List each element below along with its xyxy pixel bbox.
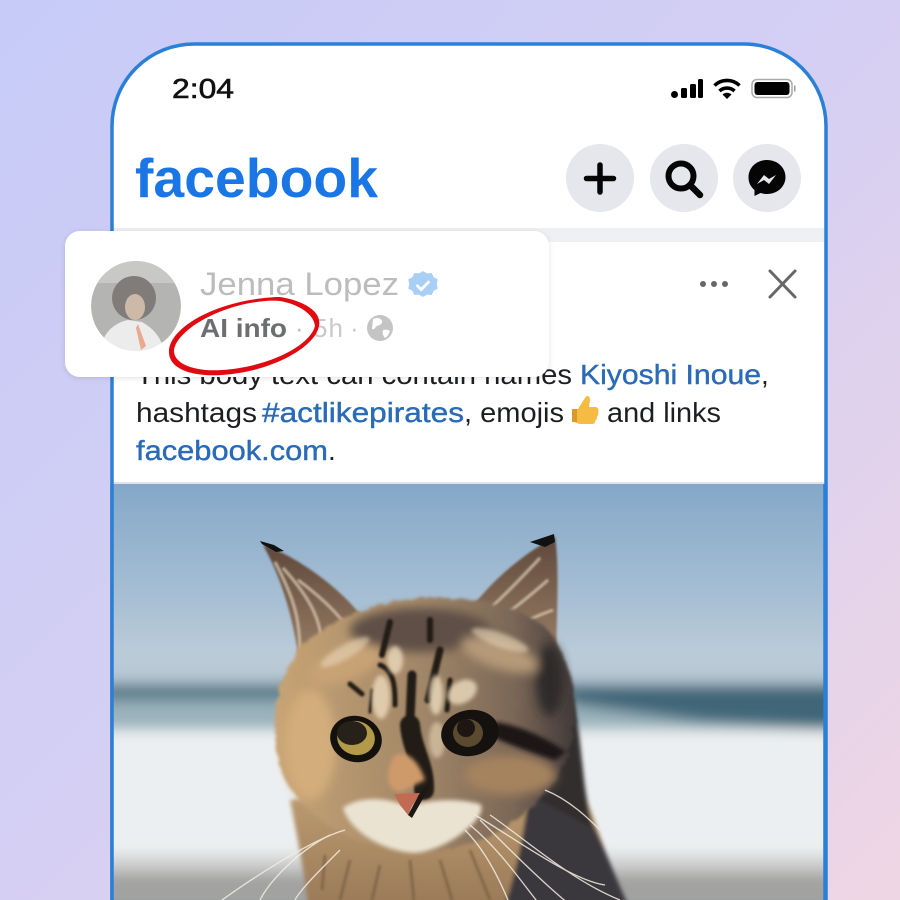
light forehead patches — [317, 623, 531, 758]
icon: battery — [752, 80, 796, 98]
icon: thumbs up emoji — [572, 396, 599, 424]
photo side borders — [112, 484, 825, 900]
icon: globe — [367, 315, 393, 341]
cat head — [275, 598, 575, 852]
button: messenger — [733, 144, 801, 212]
feed divider band — [114, 228, 824, 242]
button: search — [650, 144, 718, 212]
cat nose — [394, 793, 420, 815]
post body text: facebook.com — [136, 435, 328, 466]
post body text: , — [761, 359, 769, 390]
annotation: red hand-drawn ellipse — [169, 297, 319, 375]
post body text: #actlikepirates — [262, 397, 464, 428]
dark patch beside right eye — [495, 722, 566, 760]
post body text: . — [328, 435, 336, 466]
cat muzzle — [343, 754, 482, 853]
tan cheek and forehead tones — [284, 608, 564, 800]
whiskers — [222, 790, 620, 900]
avatar photo — [91, 261, 181, 352]
cat body — [288, 696, 629, 900]
tabby forehead stripes — [350, 620, 450, 790]
icon: wifi — [714, 80, 740, 99]
cat ears — [262, 536, 559, 652]
cat left eye — [330, 716, 382, 762]
sky — [112, 484, 825, 684]
post body text: Kiyoshi Inoue — [580, 359, 761, 390]
icon: close — [770, 271, 795, 297]
sea and waves — [100, 660, 840, 900]
icon: cell signal — [671, 79, 703, 98]
phone frame — [112, 44, 826, 900]
button: plus — [566, 144, 634, 212]
post body text — [136, 359, 769, 466]
post top edge line — [114, 482, 824, 484]
callout card: post author: · — [350, 313, 359, 343]
icon: more dots — [700, 281, 728, 287]
facebook logo: facebook — [135, 147, 378, 209]
icon: verified badge — [408, 271, 438, 297]
post body text: hashtags — [136, 397, 257, 428]
post body text: This body text can contain names — [136, 359, 572, 390]
callout card: post author — [65, 231, 549, 377]
cat right eye — [441, 710, 499, 756]
post meta: time: · — [295, 313, 304, 343]
author name: Jenna Lopez — [200, 266, 399, 302]
post body text: and links — [607, 397, 721, 428]
photo: cat on a beach — [100, 484, 840, 900]
AI info label: AI info — [200, 313, 287, 343]
post body text: , emojis — [464, 397, 564, 428]
callout card: post author: 5h — [313, 313, 343, 343]
status bar time: 2:04 — [172, 73, 234, 104]
chest fur strokes — [322, 850, 490, 900]
